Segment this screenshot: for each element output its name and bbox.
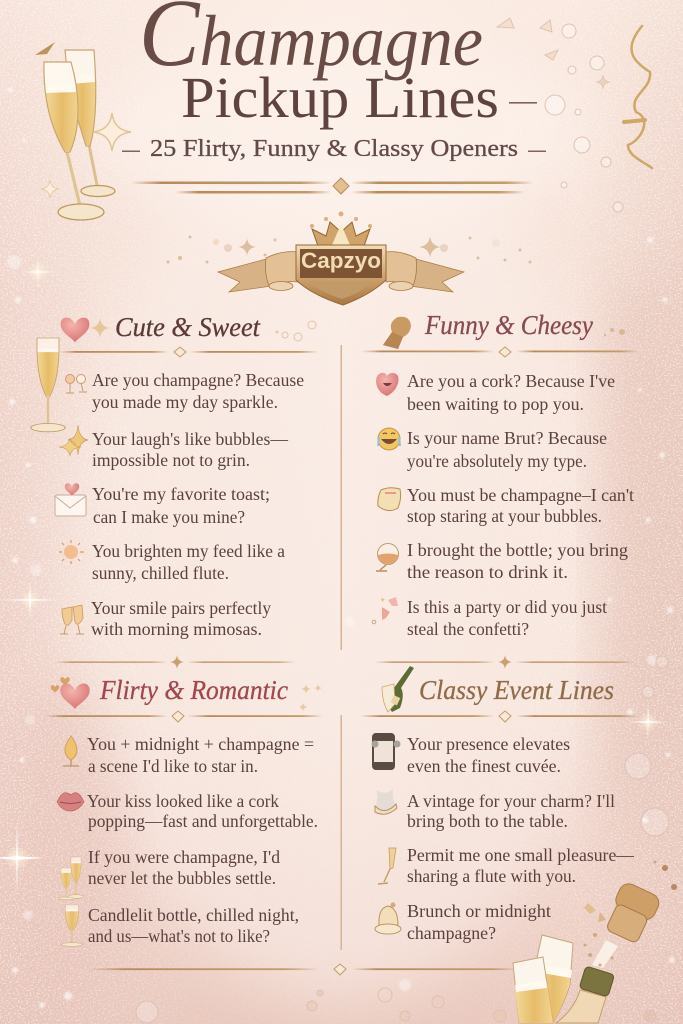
- divider: [360, 711, 638, 722]
- item 1: even the finest cuvée.: [407, 756, 561, 776]
- item 2: Your laugh's like bubbles—: [92, 429, 288, 449]
- item 1: been waiting to pop you.: [407, 394, 584, 414]
- item 3: never let the bubbles settle.: [88, 868, 276, 888]
- item 2: popping—fast and unforgettable.: [88, 811, 318, 831]
- logo: Capzyo badge: [218, 212, 464, 305]
- bottle: [556, 990, 606, 1023]
- title dash: [509, 102, 537, 104]
- logo text: Capzyo: [301, 248, 381, 273]
- shield: [296, 245, 386, 305]
- item 4: Brunch or midnight: [407, 901, 551, 921]
- item 4: You brighten my feed like a: [92, 541, 285, 561]
- icon: heart: [61, 317, 316, 342]
- item 3: You must be champagne–I can't: [407, 485, 634, 505]
- item 4: [61, 905, 299, 946]
- header divider: [131, 178, 533, 194]
- icon: champagne flutes top left: [35, 42, 131, 220]
- item 4: I brought the bottle; you bring: [407, 540, 628, 560]
- decoration: bubbles and confetti lower area: [136, 656, 669, 1023]
- item 3: Permit me one small pleasure—: [407, 845, 635, 865]
- item 3: If you were champagne, I'd: [88, 847, 280, 867]
- item 2: [375, 789, 615, 831]
- item 3: [378, 485, 634, 526]
- item 2: A vintage for your charm? I'll: [407, 791, 615, 811]
- item 3: sharing a flute with you.: [407, 866, 576, 886]
- item 5: with morning mimosas.: [91, 619, 262, 639]
- item 3: [58, 847, 280, 900]
- item 1: [63, 734, 314, 776]
- item 4: and us—what's not to like?: [88, 926, 270, 946]
- item 4: Candlelit bottle, chilled night,: [88, 905, 299, 925]
- icon: hearts: [51, 677, 322, 712]
- panel: classy event lines: [360, 666, 638, 943]
- decoration: streamer: [624, 26, 652, 168]
- ribbon folds: [266, 252, 298, 288]
- item 2: impossible not to grin.: [92, 450, 250, 470]
- item 2: bring both to the table.: [407, 811, 568, 831]
- spray: [584, 860, 677, 968]
- item 1: a scene I'd like to star in.: [88, 756, 258, 776]
- item 2: Is your name Brut? Because: [407, 428, 607, 448]
- back flute: [530, 935, 573, 1023]
- item 5: Your smile pairs perfectly: [91, 598, 271, 618]
- divider: [45, 711, 322, 722]
- front flute: [513, 957, 553, 1023]
- front flute: [44, 62, 104, 220]
- decoration: bubbles and confetti top right: [497, 18, 623, 212]
- item 4: champagne?: [407, 923, 496, 943]
- item 4: [376, 540, 628, 582]
- item 4: sunny, chilled flute.: [92, 563, 229, 583]
- item 2: [378, 428, 607, 471]
- item 1: [376, 371, 615, 414]
- item 4: the reason to drink it.: [407, 562, 568, 582]
- cork: [602, 881, 662, 945]
- crown: [312, 222, 370, 246]
- divider: [60, 347, 318, 357]
- heading: Flirty & Romantic: Flirty & Romantic: [99, 675, 288, 705]
- item 1: Are you champagne? Because: [92, 370, 304, 390]
- item 3: [378, 845, 635, 886]
- item 2: [59, 425, 288, 470]
- heading: Classy Event Lines: Classy Event Lines: [419, 675, 614, 705]
- item 1: Are you a cork? Because I've: [407, 371, 615, 391]
- item 1: [66, 370, 304, 412]
- illustration: popping bottle and flutes: [513, 860, 677, 1023]
- item 1: you made my day sparkle.: [92, 392, 278, 412]
- decoration: glitter around logo: [166, 236, 532, 264]
- ribbon tails: [218, 259, 272, 292]
- heading: Funny & Cheesy: Funny & Cheesy: [424, 310, 593, 340]
- item 4: [59, 540, 285, 583]
- item 2: [57, 791, 318, 831]
- dividers between rows and columns: [55, 345, 635, 975]
- title: [139, 0, 537, 130]
- item 4: [375, 901, 551, 943]
- item 3: stop staring at your bubbles.: [407, 506, 602, 526]
- back flute: [65, 50, 115, 196]
- item 1: Your presence elevates: [407, 734, 570, 754]
- title: serif word: Pickup Lines: [181, 65, 499, 130]
- item 5: [60, 598, 271, 639]
- divider: [362, 347, 638, 357]
- icon: bottle and glass: [382, 666, 414, 712]
- icon: cork: [383, 317, 625, 349]
- item 3: You're my favorite toast;: [92, 484, 270, 504]
- item 1: [372, 734, 570, 776]
- item 3: [55, 483, 270, 527]
- icon: tall flute: [31, 338, 65, 432]
- panel: funny and cheesy: [362, 310, 638, 639]
- item 2: you're absolutely my type.: [407, 451, 587, 471]
- heading: Cute & Sweet: Cute & Sweet: [115, 312, 261, 342]
- subtitle: 25 Flirty, Funny & Classy Openers: [150, 136, 518, 162]
- item 5: Is this a party or did you just: [407, 597, 607, 617]
- panel: cute and sweet: [31, 312, 318, 639]
- panel: flirty and romantic: [45, 675, 322, 946]
- item 5: steal the confetti?: [407, 619, 529, 639]
- item 5: [372, 597, 607, 639]
- item 2: Your kiss looked like a cork: [87, 791, 279, 811]
- item 1: You + midnight + champagne =: [87, 734, 314, 754]
- item 3: can I make you mine?: [93, 507, 245, 527]
